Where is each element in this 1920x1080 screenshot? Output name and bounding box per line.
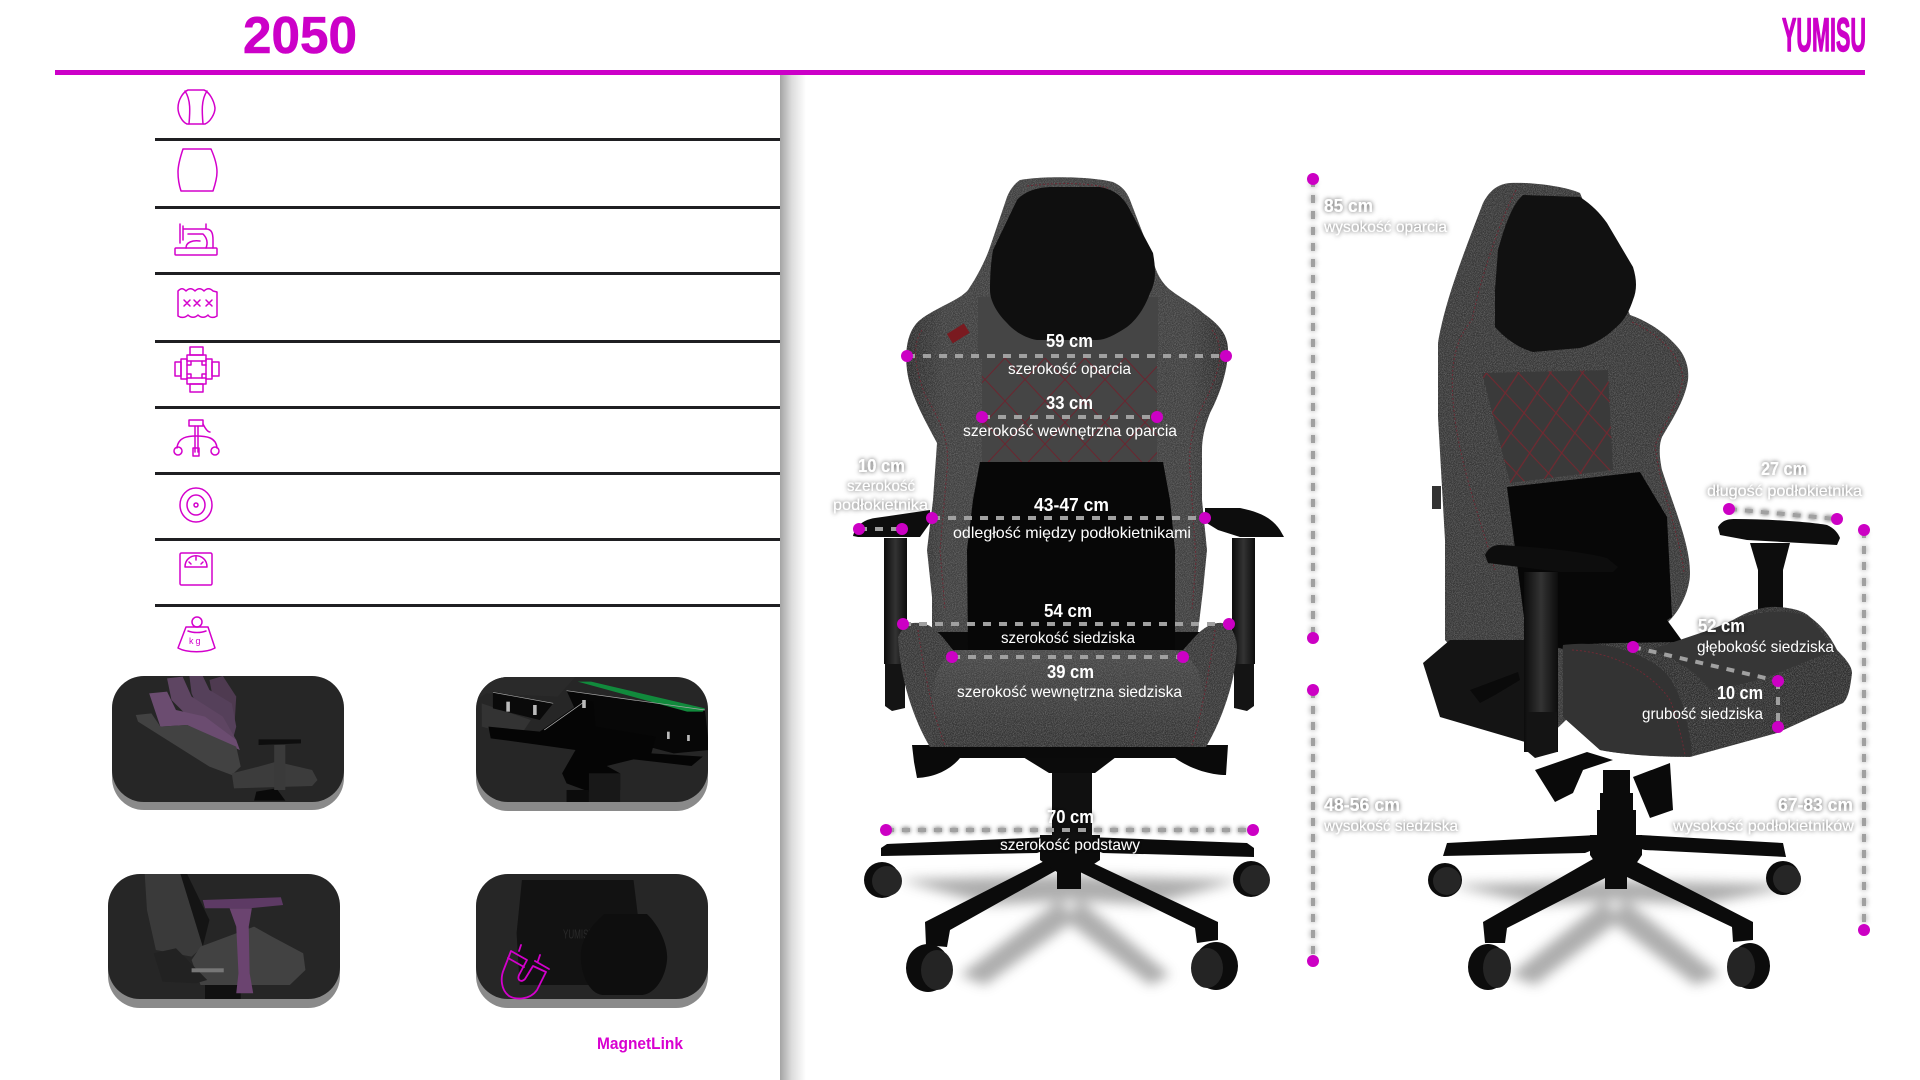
star base: [1443, 770, 1786, 943]
dimension: 43-47 cm armrest gap: odległość między podłokietnikami: [953, 525, 1191, 542]
back stitching: [916, 184, 1220, 610]
front view chair: [853, 177, 1284, 992]
dimension: 54 cm seat width: [897, 601, 1235, 647]
dimension: 27 cm armrest length: długość podłokietnika: [1707, 483, 1862, 500]
center panel: [978, 297, 1158, 359]
card: 4D armrest: [108, 874, 340, 1008]
star base: [881, 745, 1254, 947]
dimension: 27 cm armrest length: [1707, 459, 1862, 525]
arm posts: [884, 538, 1255, 711]
dimension: 43-47 cm armrest gap: 43-47 cm: [1034, 495, 1109, 515]
floor shadow: [1450, 880, 1800, 985]
card: magnetic cushions: YUMISU: [563, 927, 594, 942]
dimension: 85 cm back height: 85 cm: [1324, 196, 1373, 216]
dimension: 48-56 cm seat height: wysokość siedziska: [1323, 818, 1458, 835]
icon: lumbar cushion: [178, 149, 217, 191]
back shell: [906, 177, 1228, 640]
dimension: 59 cm back width: [901, 331, 1232, 378]
near seat bolster: [1563, 644, 1692, 756]
near armrest: [1485, 545, 1618, 758]
dimension: 54 cm seat width: szerokość siedziska: [1001, 630, 1135, 647]
dimension: 33 cm inner back width: 33 cm: [1046, 393, 1093, 413]
dimension: 10 cm seat thickness: grubość siedziska: [1642, 706, 1763, 723]
dimension: 85 cm back height: wysokość oparcia: [1323, 219, 1447, 236]
headrest: [1495, 195, 1636, 352]
dimension: 27 cm armrest length: 27 cm: [1761, 459, 1807, 479]
dimension: 39 cm inner seat width: szerokość wewnętrzna siedziska: [957, 684, 1182, 701]
casters: [864, 861, 1270, 992]
dark gap behind seat: [932, 632, 1202, 656]
dimension: 10 cm seat thickness: 10 cm: [1717, 683, 1763, 703]
side badge: [1432, 486, 1441, 509]
header rule: [55, 70, 1865, 75]
caption: MagnetLink: MagnetLink: [597, 1034, 683, 1053]
dimension: 33 cm inner back width: [963, 393, 1177, 440]
quilted panel: [1482, 370, 1613, 483]
far armrest: [1718, 519, 1840, 612]
dimension: 10 cm armrest width: szerokość: [847, 478, 915, 495]
recline lever: [1470, 672, 1520, 703]
dimension: 39 cm inner seat width: 39 cm: [1047, 662, 1094, 682]
icon: kg weight: [178, 617, 215, 652]
spec list panel: [155, 90, 780, 652]
quilted panel: [982, 358, 1157, 462]
dimension: 10 cm armrest width: 10 cm: [858, 456, 905, 476]
dimension: 67-83 cm armrest height: 67-83 cm: [1778, 795, 1853, 815]
dimension: 70 cm base width: 70 cm: [1047, 807, 1094, 827]
side view chair: [1423, 183, 1852, 990]
icon: sewing machine: [175, 224, 217, 255]
casters: [1428, 861, 1801, 990]
panel divider shadow: [780, 75, 806, 1080]
icon: caster wheel: [180, 488, 212, 522]
floor shadow: [900, 875, 1240, 985]
card: backrest recline: [112, 676, 344, 810]
dimension: 52 cm seat depth: głębokość siedziska: [1697, 639, 1834, 656]
dimension: 54 cm seat width: 54 cm: [1044, 601, 1092, 621]
dimension: 52 cm seat depth: [1627, 616, 1834, 681]
title: 2050: 2050: [243, 7, 357, 65]
seat front: [933, 650, 1203, 747]
seat cushion: [898, 623, 1237, 747]
back shell: [1438, 183, 1690, 745]
dimension: 10 cm armrest width: podłokietnika: [833, 497, 928, 514]
icon: magnet: [502, 945, 549, 998]
card: tilt mechanism: [476, 677, 709, 811]
dimension: 52 cm seat depth: 52 cm: [1698, 616, 1745, 636]
seat stitching: [918, 630, 1215, 745]
armrests: [853, 508, 1284, 537]
icon: headrest: [178, 90, 215, 124]
dimension: 10 cm armrest width: [833, 456, 928, 535]
icon: weight scale: [180, 553, 212, 585]
side frame: [1423, 640, 1535, 745]
dimension: 48-56 cm seat height: 48-56 cm: [1324, 795, 1400, 815]
lumbar cushion: [1507, 472, 1683, 650]
dimension: 39 cm inner seat width: [946, 651, 1189, 701]
dimension: 67-83 cm armrest height: wysokość podłokietników: [1672, 818, 1854, 835]
icon: seat mechanism: [175, 347, 219, 392]
chair badge: [947, 323, 970, 343]
control levers: [1535, 752, 1673, 818]
icon: chair base: [174, 420, 219, 456]
dimension: 85 cm back height: [1307, 173, 1447, 644]
dimension: 70 cm base width: [880, 807, 1259, 854]
dimension: 70 cm base width: szerokość podstawy: [1000, 837, 1140, 854]
dimension: 10 cm seat thickness: [1642, 675, 1784, 733]
seat cushion: [1562, 607, 1852, 757]
icon: kg weight: kg: [189, 636, 203, 646]
dimension: 43-47 cm armrest gap: [926, 495, 1211, 542]
dimension: 67-83 cm armrest height: [1672, 524, 1870, 936]
headrest: [990, 187, 1155, 340]
dimension: 48-56 cm seat height: [1307, 684, 1458, 967]
back stitching: [1452, 190, 1684, 573]
bolster stitching: [1572, 650, 1685, 755]
dimension: 59 cm back width: 59 cm: [1046, 331, 1093, 351]
card: magnetic cushions: [476, 874, 708, 1008]
seat top highlight: [1650, 612, 1837, 690]
dimension: 33 cm inner back width: szerokość wewnętrzna oparcia: [963, 423, 1177, 440]
lumbar cushion: [967, 462, 1175, 650]
dimension: 59 cm back width: szerokość oparcia: [1008, 361, 1131, 378]
icon: quilted foam: [178, 289, 217, 317]
